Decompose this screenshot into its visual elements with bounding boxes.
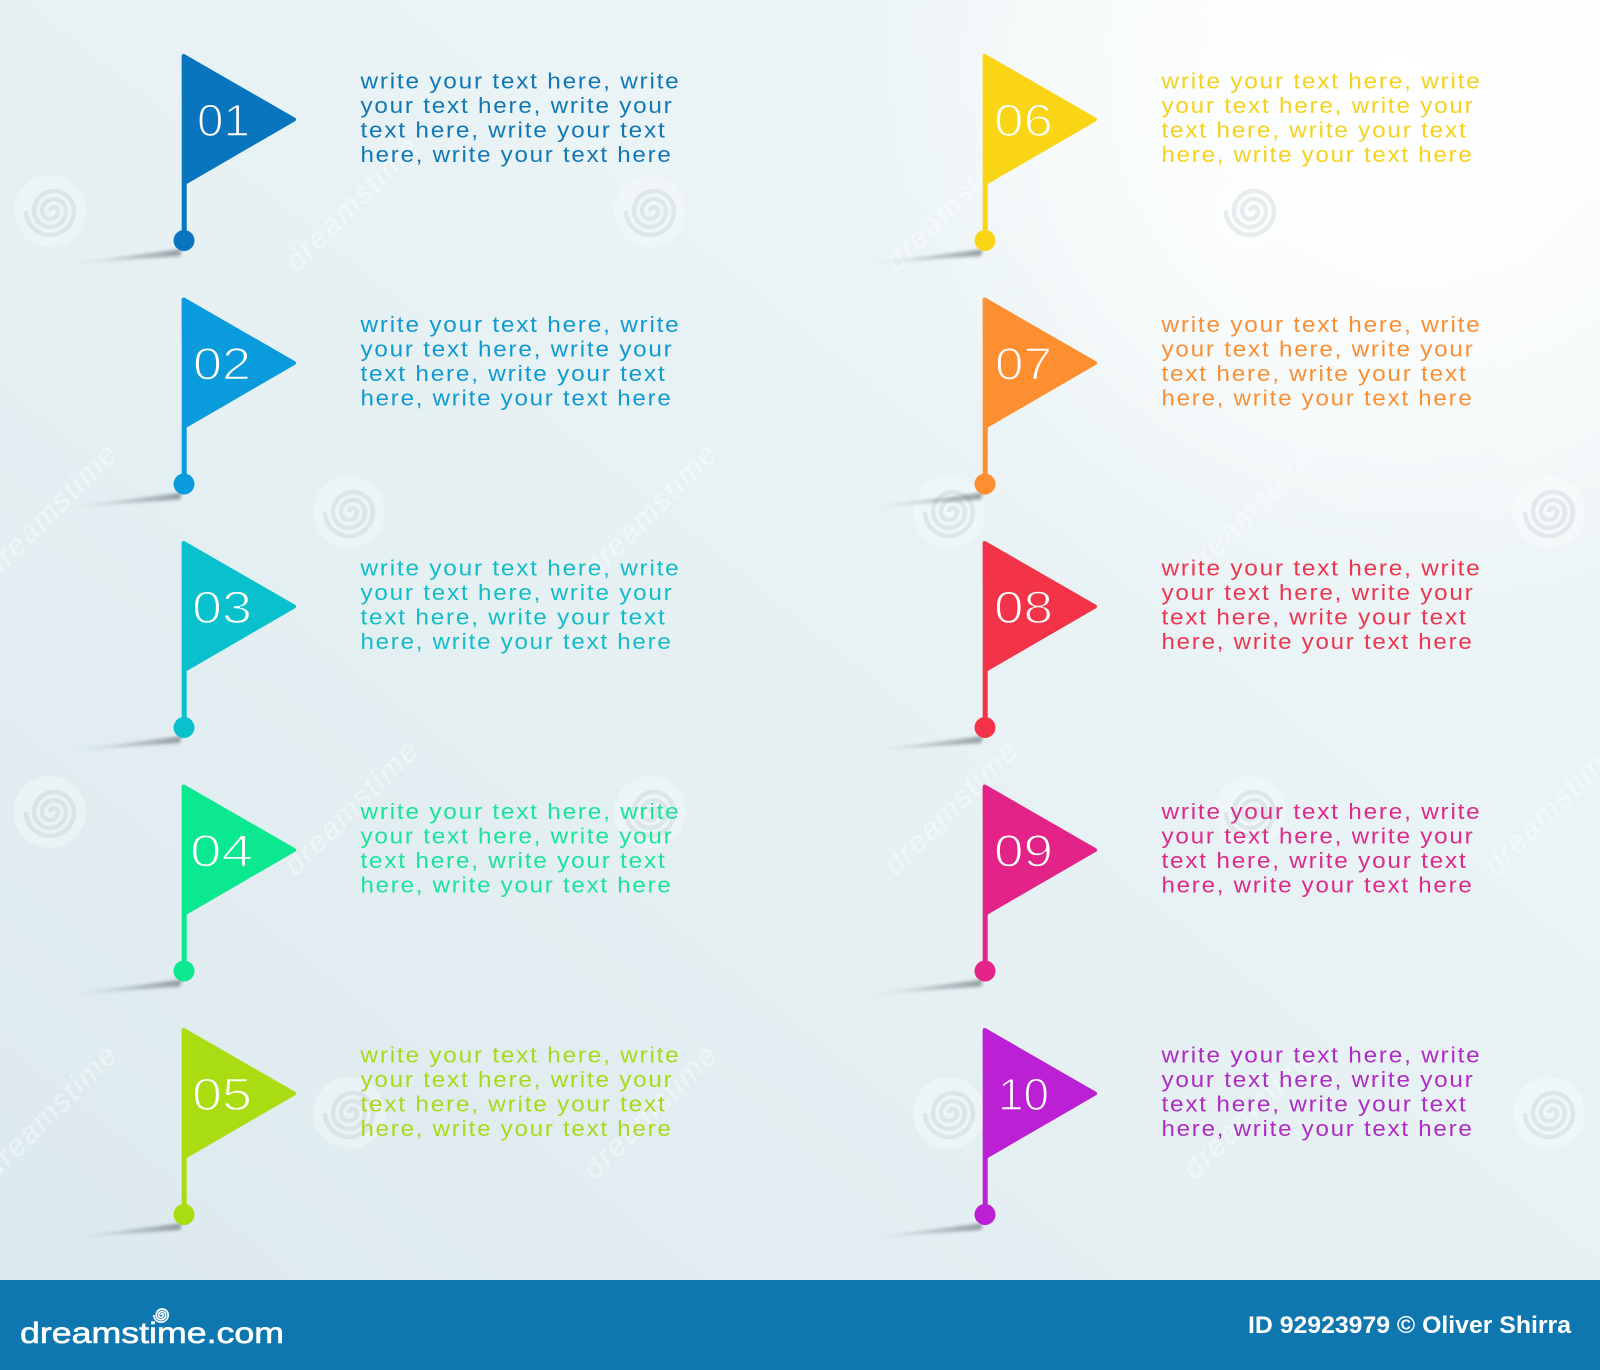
- flag 08: 08: [994, 582, 1053, 633]
- item 06: [867, 56, 1482, 264]
- flag 09: 09: [994, 826, 1053, 876]
- text 05: your text here, write your: [360, 1067, 674, 1092]
- flag 05: 05: [192, 1069, 252, 1120]
- flag 10: [867, 1030, 1095, 1238]
- text 09: text here, write your text: [1162, 848, 1468, 873]
- watermark text: dreamstime: [279, 131, 426, 278]
- text 02: [359, 312, 680, 410]
- text 03: your text here, write your: [360, 580, 674, 605]
- text 06: write your text here, write: [1160, 68, 1482, 94]
- watermark text: dreamstime: [278, 735, 425, 882]
- flag 09: [867, 786, 1095, 994]
- text 01: your text here, write your: [360, 93, 674, 118]
- text 03: here, write your text here: [360, 629, 672, 654]
- watermark spirals: [14, 175, 1585, 1149]
- item 08: [867, 543, 1482, 751]
- watermark text: [0, 131, 1600, 1186]
- text 10: text here, write your text: [1162, 1092, 1468, 1116]
- watermark text: dreamstime: [878, 735, 1025, 882]
- text 09: your text here, write your: [1162, 824, 1474, 848]
- item 01: [66, 56, 680, 264]
- text 06: text here, write your text: [1162, 118, 1468, 142]
- text 08: write your text here, write: [1160, 556, 1482, 580]
- text 08: [1160, 556, 1482, 654]
- flag 01: 01: [197, 95, 250, 146]
- flag 10: 10: [998, 1069, 1049, 1120]
- watermark text: dreamstime: [1177, 438, 1324, 585]
- text 07: text here, write your text: [1162, 361, 1468, 386]
- text 07: here, write your text here: [1162, 386, 1474, 410]
- flag 08: [867, 543, 1095, 751]
- text 06: your text here, write your: [1162, 93, 1474, 118]
- watermark text: dreamstime: [879, 131, 1026, 278]
- text 08: your text here, write your: [1162, 580, 1474, 605]
- watermark text: dreamstime: [577, 1039, 724, 1186]
- flag 06: 06: [994, 95, 1053, 146]
- item 02: [66, 300, 680, 508]
- text 04: here, write your text here: [360, 872, 672, 898]
- text 05: write your text here, write: [359, 1042, 680, 1068]
- text 08: text here, write your text: [1162, 604, 1468, 630]
- text 08: here, write your text here: [1162, 629, 1474, 654]
- footer logo: dreamstime.com: [20, 1317, 284, 1350]
- item 09: [867, 786, 1482, 994]
- footer bar: [0, 1280, 1600, 1370]
- flag 04: [66, 786, 294, 994]
- text 07: [1160, 312, 1482, 410]
- text 04: your text here, write your: [360, 824, 674, 848]
- text 04: write your text here, write: [359, 799, 680, 824]
- watermark text: dreamstime: [577, 438, 724, 585]
- text 04: [359, 799, 680, 898]
- text 07: write your text here, write: [1160, 312, 1482, 337]
- item 04: [66, 786, 680, 994]
- flag 07: [867, 300, 1095, 508]
- text 01: write your text here, write: [359, 68, 680, 94]
- flag 06: [867, 56, 1095, 264]
- flag 04: 04: [190, 826, 253, 876]
- footer logo: [20, 1309, 284, 1350]
- flag 01: [66, 56, 294, 264]
- text 03: write your text here, write: [359, 556, 680, 580]
- text 05: [359, 1042, 680, 1141]
- text 09: write your text here, write: [1160, 799, 1482, 824]
- text 04: text here, write your text: [360, 848, 666, 873]
- flag 07: 07: [995, 338, 1052, 390]
- flag 02: 02: [193, 338, 251, 390]
- text 10: [1160, 1042, 1482, 1141]
- item 07: [867, 300, 1482, 508]
- text 05: text here, write your text: [360, 1092, 666, 1116]
- text 01: [359, 68, 680, 167]
- text 09: [1160, 799, 1482, 898]
- item 10: [867, 1030, 1482, 1238]
- text 10: write your text here, write: [1160, 1042, 1482, 1068]
- flag 02: [66, 300, 294, 508]
- item 03: [66, 543, 680, 751]
- flag 03: [66, 543, 294, 751]
- text 06: [1160, 68, 1482, 167]
- footer credit: ID 92923979 © Oliver Shirra: [1248, 1312, 1572, 1339]
- text 06: here, write your text here: [1162, 142, 1474, 167]
- text 01: here, write your text here: [360, 142, 672, 167]
- text 10: your text here, write your: [1162, 1067, 1474, 1092]
- text 02: here, write your text here: [360, 386, 672, 410]
- flag 05: [66, 1030, 294, 1238]
- watermark text: dreamstime: [1177, 1039, 1324, 1186]
- text 02: write your text here, write: [359, 312, 680, 337]
- text 10: here, write your text here: [1162, 1116, 1474, 1141]
- text 09: here, write your text here: [1162, 872, 1474, 898]
- flag 03: 03: [192, 582, 252, 633]
- text 02: your text here, write your: [360, 336, 674, 362]
- text 07: your text here, write your: [1162, 336, 1474, 362]
- text 01: text here, write your text: [360, 118, 666, 142]
- item 05: [66, 1030, 680, 1238]
- text 05: here, write your text here: [360, 1116, 672, 1141]
- text 03: [359, 556, 680, 654]
- text 02: text here, write your text: [360, 361, 666, 386]
- text 03: text here, write your text: [360, 604, 666, 630]
